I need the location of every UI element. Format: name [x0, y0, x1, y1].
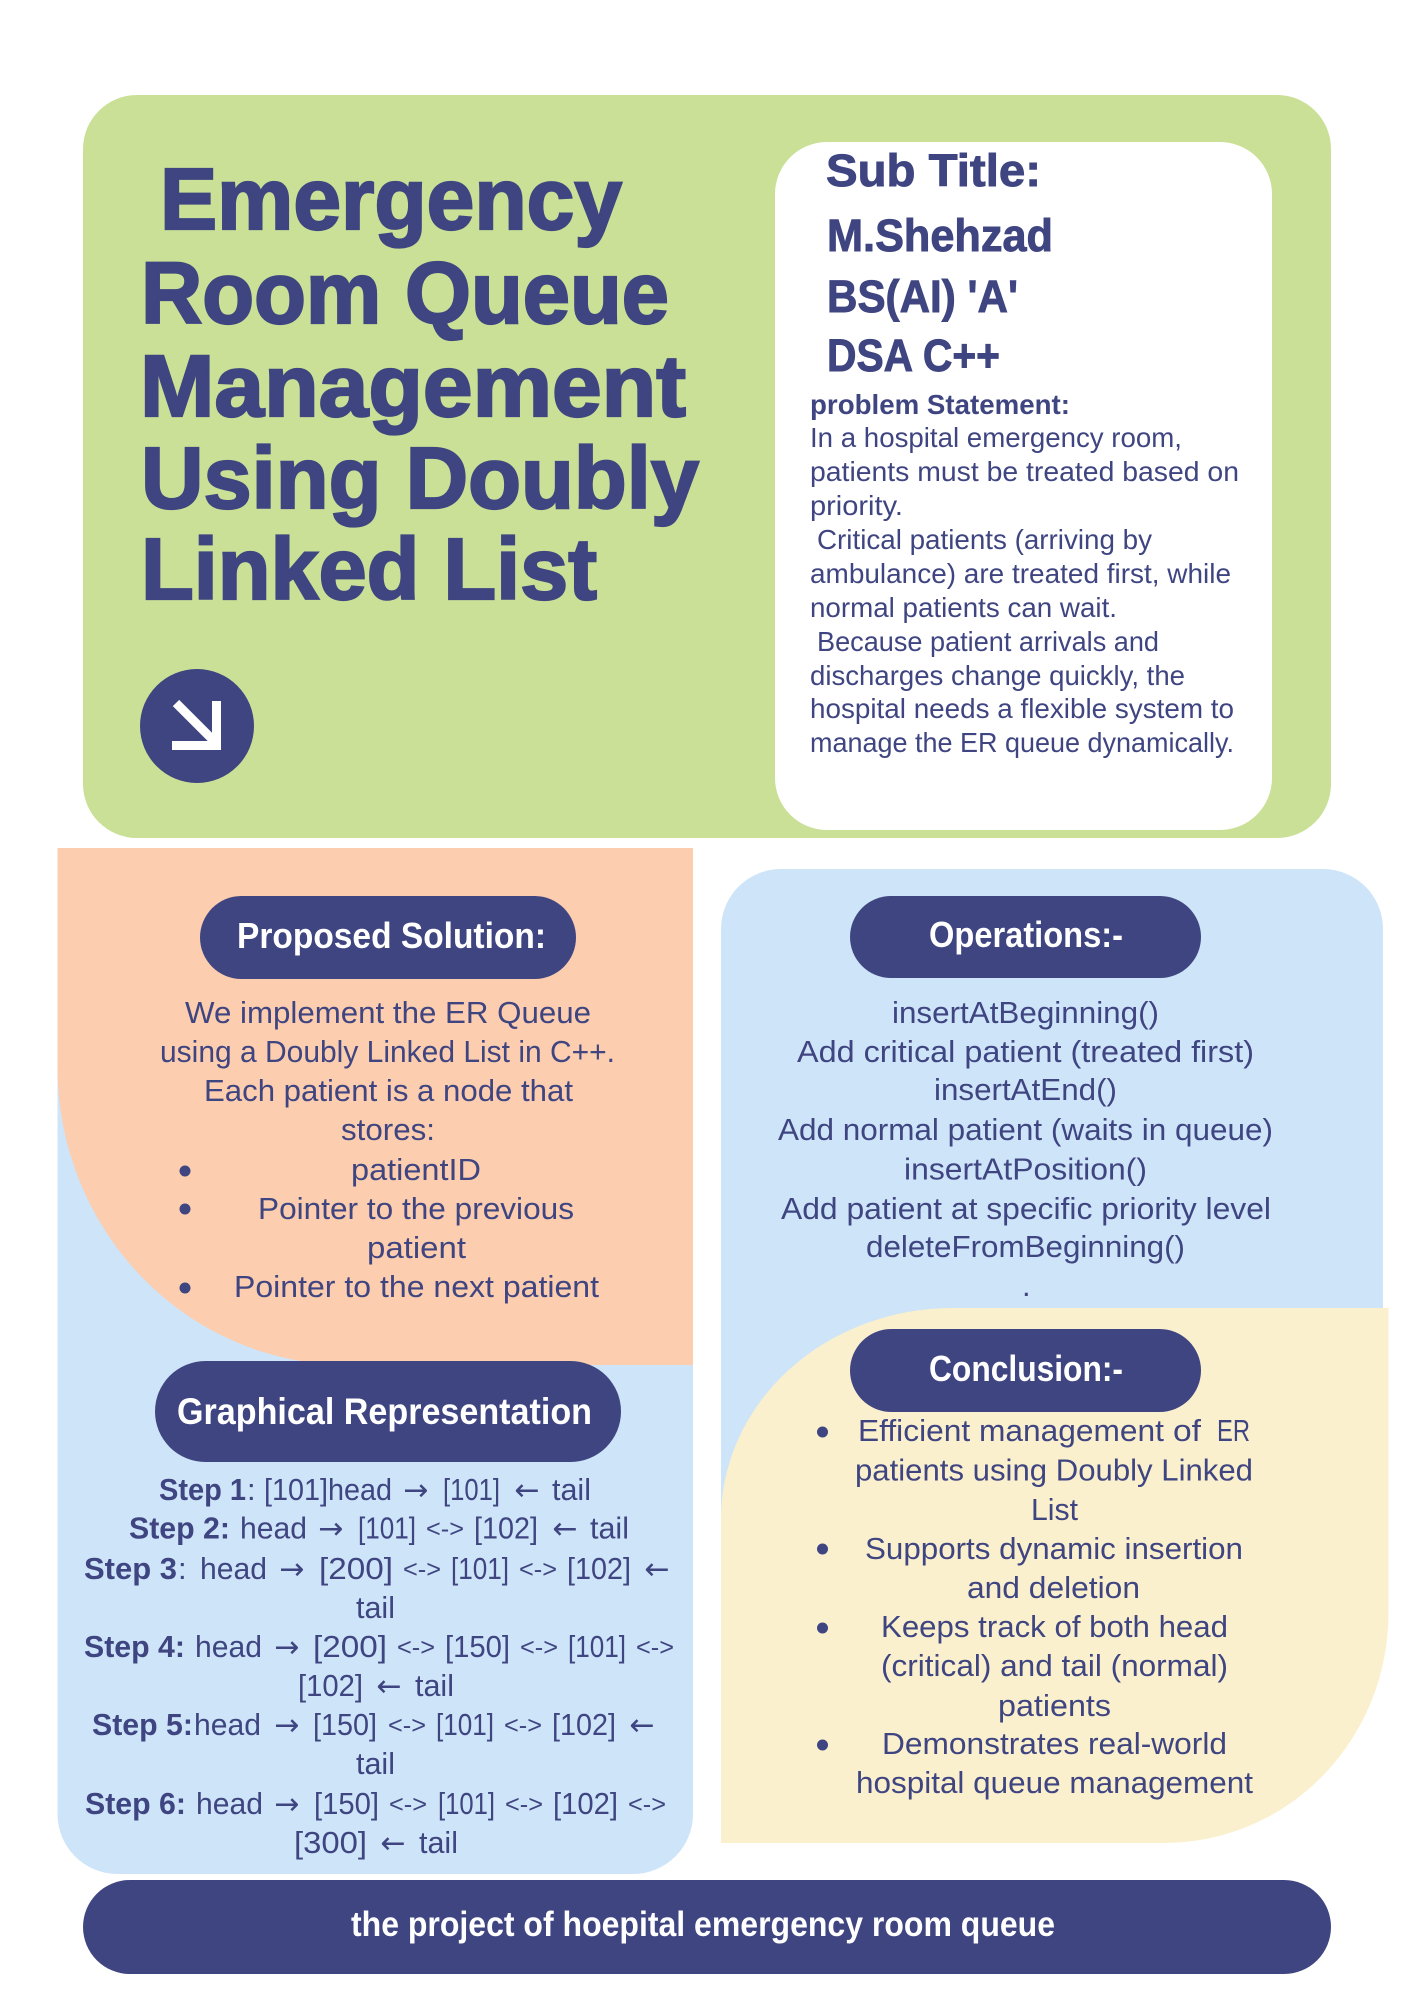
bullet list: conclusion points: Keeps track of both head: [881, 1609, 1228, 1644]
steps text: :: [178, 1551, 187, 1586]
bullet list: conclusion points: (critical) and tail (normal): [881, 1648, 1228, 1683]
steps text: Step 2:: [129, 1510, 230, 1546]
steps text: →: [279, 1552, 305, 1587]
steps text: <->: [628, 1790, 666, 1818]
steps text: <->: [519, 1556, 557, 1584]
heading pill: proposed solution: Proposed Solution:: [237, 915, 546, 956]
steps text: [101]: [436, 1707, 494, 1742]
footer bar: the project of hoepital emergency room queue: [351, 1905, 1055, 1944]
panel: graphical representation background: [57, 1000, 693, 1874]
operations text: insertAtBeginning(): [892, 995, 1159, 1030]
steps text: <->: [397, 1634, 435, 1662]
steps text: ←: [644, 1552, 670, 1587]
operations text: insertAtEnd(): [934, 1072, 1117, 1107]
operations text: Add patient at specific priority level: [781, 1191, 1271, 1226]
proposed solution text: using a Doubly Linked List in C++.: [160, 1034, 615, 1069]
proposed solution text: stores:: [341, 1112, 435, 1147]
problem statement text: Critical patients (arriving by: [817, 524, 1152, 555]
steps text: →: [274, 1787, 300, 1822]
operations text: [778, 995, 1273, 1303]
steps text: [101]: [451, 1551, 509, 1586]
white card: [775, 142, 1272, 830]
problem statement text: Because patient arrivals and: [817, 626, 1159, 657]
steps text: [150]: [313, 1707, 377, 1742]
subtitle block: [826, 145, 1053, 381]
bullet list: node fields: [180, 1152, 599, 1304]
steps text: [101]: [438, 1786, 495, 1821]
title: Linked List: [141, 521, 597, 618]
steps text: head: [240, 1510, 307, 1546]
operations text: insertAtPosition(): [904, 1152, 1147, 1186]
steps text: [102]: [474, 1510, 538, 1546]
problem statement text: priority.: [810, 490, 903, 521]
bullet list: conclusion points: hospital queue management: [856, 1765, 1253, 1800]
heading pill: graphical representation: Graphical Representation: [177, 1391, 592, 1432]
steps text: Step 5:: [92, 1707, 193, 1742]
steps text: tail: [356, 1590, 395, 1625]
steps text: [102]: [552, 1707, 616, 1742]
steps text: <->: [520, 1634, 558, 1662]
steps text: [102]: [298, 1668, 363, 1703]
title: Emergency: [160, 151, 622, 248]
title: [140, 151, 699, 618]
steps text: →: [318, 1512, 344, 1546]
steps text: head: [195, 1629, 262, 1664]
problem statement text: ambulance) are treated first, while: [810, 558, 1231, 589]
steps text: [101]head: [264, 1472, 392, 1507]
operations text: .: [1022, 1268, 1031, 1303]
panel: subtitle and problem statement: [775, 142, 1272, 830]
bullet list: conclusion points: Efficient management: [858, 1413, 1164, 1448]
bullet list: node fields: patient: [367, 1230, 466, 1265]
header background: [83, 95, 1331, 838]
problem statement text: manage the ER queue dynamically.: [810, 727, 1234, 758]
steps text: [102]: [553, 1786, 618, 1821]
subtitle block: BS(AI) 'A': [827, 271, 1018, 322]
steps text: Step 1: [159, 1472, 246, 1507]
steps text: tail: [590, 1510, 629, 1546]
operations text: Add normal patient (waits in queue): [778, 1112, 1273, 1147]
heading pill: conclusion: [850, 1329, 1201, 1412]
proposed solution text: Each patient is a node that: [204, 1073, 573, 1108]
steps text: Step 6:: [85, 1786, 186, 1821]
bullet list: node fields: patientID: [351, 1152, 481, 1187]
bullet list: node fields: Pointer to the next patient: [234, 1269, 599, 1304]
title: Using Doubly: [141, 430, 699, 527]
proposed solution text: We implement the ER Queue: [185, 995, 591, 1030]
peach background: [58, 848, 693, 1365]
subtitle block: Sub Title:: [826, 145, 1041, 196]
steps text: head: [194, 1707, 261, 1742]
panel: conclusion: [721, 1308, 1389, 1843]
steps text: ←: [552, 1512, 578, 1546]
steps text: head: [200, 1551, 267, 1586]
subtitle block: DSA C++: [827, 330, 1000, 381]
steps text: [102]: [567, 1551, 631, 1586]
problem statement text: normal patients can wait.: [810, 592, 1117, 623]
footer bar: [83, 1880, 1331, 1974]
bullet list: conclusion points: patients using Doubly Linked: [855, 1452, 1253, 1488]
heading pill: proposed solution: [200, 896, 576, 979]
steps text: →: [274, 1708, 300, 1743]
steps text: ←: [380, 1826, 406, 1861]
steps text: [101]: [568, 1629, 626, 1664]
heading pill: graphical representation: [155, 1361, 621, 1462]
title: Management: [140, 338, 686, 435]
steps text: tail: [552, 1472, 591, 1507]
steps text: tail: [419, 1825, 458, 1860]
steps text: ←: [629, 1708, 655, 1743]
problem statement text: discharges change quickly, the: [810, 660, 1185, 691]
operations text: deleteFromBeginning(): [866, 1229, 1185, 1264]
panel: header: [83, 95, 1331, 838]
steps text: [101]: [443, 1472, 500, 1507]
icon: arrow in circle: [140, 669, 254, 783]
heading pill: conclusion: Conclusion:-: [929, 1348, 1123, 1389]
bullet list: node fields: Pointer to the previous: [258, 1191, 574, 1226]
problem statement text: problem Statement:: [810, 389, 1070, 420]
bullet list: conclusion points: Supports dynamic insertion: [865, 1531, 1243, 1566]
bullet list: conclusion points: [817, 1413, 1253, 1800]
yellow background: [721, 1308, 1389, 1843]
steps text: [150]: [445, 1629, 510, 1664]
problem statement text: hospital needs a flexible system to: [810, 693, 1234, 724]
bullet list: conclusion points: Demonstrates real-world: [882, 1726, 1227, 1761]
steps text: [200]: [319, 1551, 393, 1586]
steps text: [200]: [313, 1629, 387, 1664]
bullet list: conclusion points: List: [1031, 1492, 1078, 1527]
heading pill: operations: [850, 896, 1201, 978]
problem statement text: [810, 389, 1239, 758]
steps text: head: [196, 1786, 263, 1821]
bullet list: conclusion points: and deletion: [967, 1570, 1140, 1605]
subtitle block: M.Shehzad: [827, 210, 1053, 261]
steps text: <->: [636, 1634, 674, 1662]
steps text: ←: [514, 1473, 540, 1508]
bullet list: conclusion points: ER: [1217, 1413, 1250, 1448]
steps text: Step 3: [84, 1551, 177, 1586]
steps text: Step 4:: [84, 1629, 185, 1664]
steps text: <->: [504, 1712, 542, 1740]
steps text: tail: [415, 1668, 454, 1703]
bullet list: conclusion points: patients: [998, 1688, 1111, 1723]
steps text: tail: [356, 1746, 395, 1781]
proposed solution text: [160, 995, 615, 1147]
steps text: [300]: [294, 1825, 367, 1860]
steps text: <->: [388, 1712, 426, 1740]
steps text: <->: [426, 1515, 464, 1543]
heading pill: operations: Operations:-: [929, 914, 1123, 955]
steps text: <->: [389, 1790, 427, 1818]
steps text: [150]: [314, 1786, 379, 1821]
panel: operations: [721, 869, 1383, 1600]
steps text: :: [247, 1472, 256, 1507]
steps text: ←: [376, 1669, 402, 1704]
blue background: [721, 869, 1383, 1600]
steps text: [101]: [358, 1510, 416, 1546]
steps text: →: [274, 1630, 300, 1665]
steps text: <->: [403, 1556, 441, 1584]
problem statement text: patients must be treated based on: [810, 456, 1239, 487]
operations text: Add critical patient (treated first): [797, 1034, 1254, 1069]
panel: proposed solution: [58, 848, 693, 1365]
steps text: →: [403, 1473, 429, 1508]
steps text: <->: [505, 1790, 543, 1818]
bullet list: conclusion points: of: [1173, 1413, 1201, 1448]
title: Room Queue: [141, 245, 669, 342]
steps text: [84, 1472, 674, 1861]
problem statement text: In a hospital emergency room,: [810, 422, 1182, 453]
